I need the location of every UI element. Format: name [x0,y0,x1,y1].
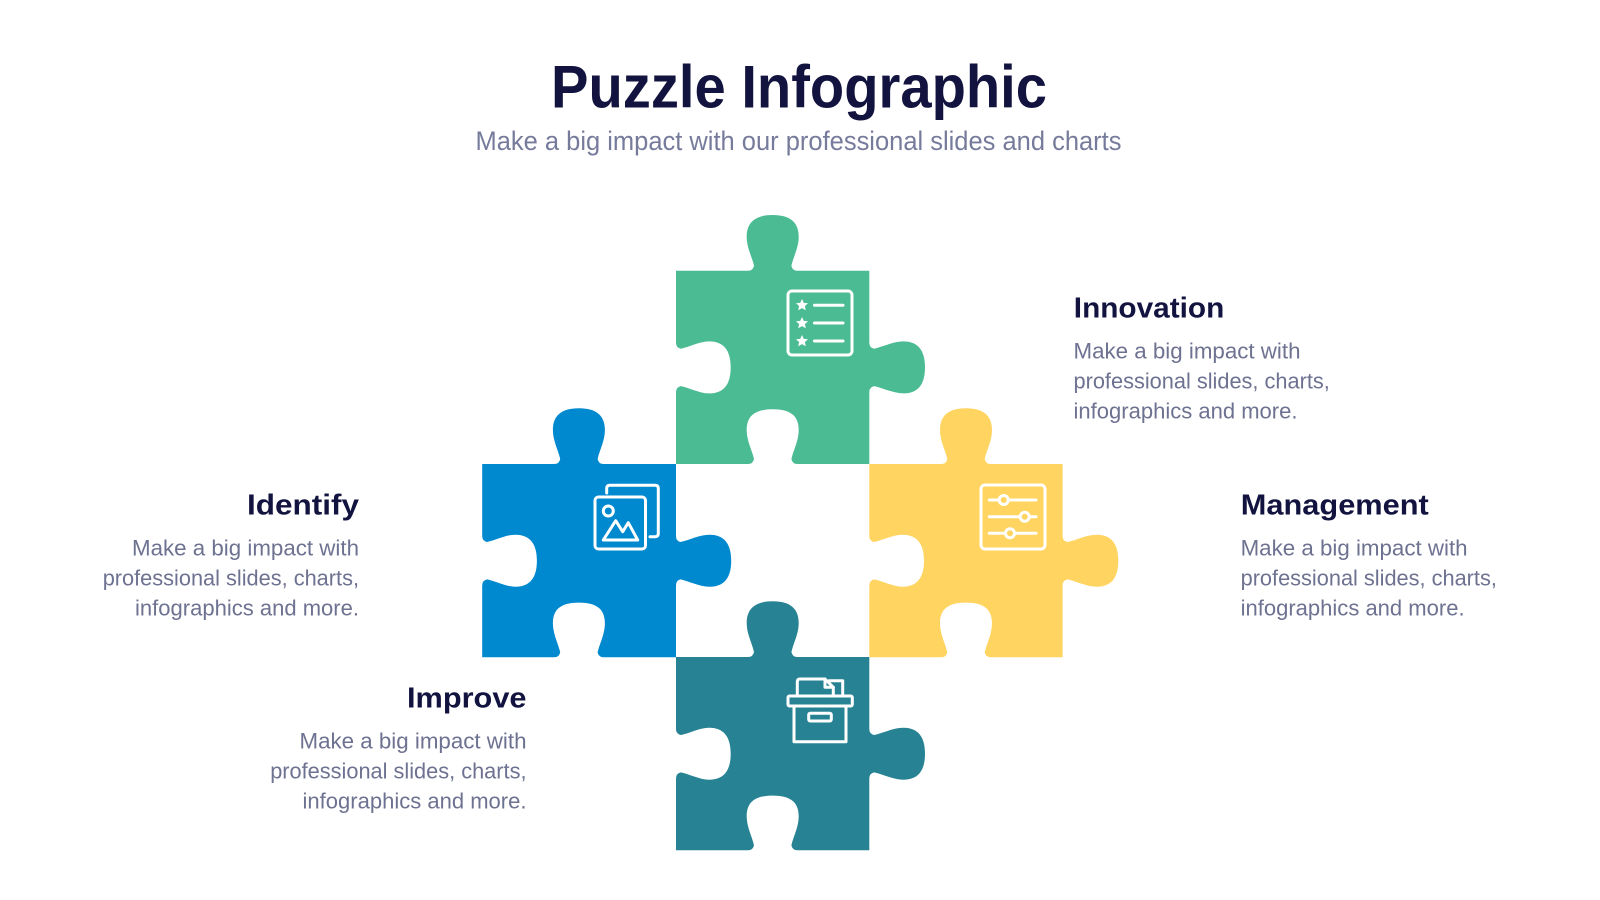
text block: Management [1241,490,1497,620]
heading: Innovation: Innovation [1074,293,1224,325]
body: Improve: infographics and more. [302,788,526,813]
text block: Improve [270,683,526,813]
puzzle piece: yellow [869,408,1118,657]
heading: Identify: Identify [247,490,359,522]
body: Improve [270,728,526,813]
subtitle: Make a big impact with our professional slides and charts [476,126,1122,156]
body: Innovation: professional slides, charts, [1074,368,1330,393]
icon: star checklist [788,291,852,355]
icon: archive box [788,679,852,742]
body: Management [1241,535,1497,620]
body: Management: professional slides, charts, [1241,565,1497,590]
body: Identify: infographics and more. [135,595,359,620]
body: Innovation [1074,338,1330,423]
heading: Management: Management [1241,490,1429,522]
heading: Improve: Improve [407,683,526,715]
icon: sliders [981,485,1045,549]
puzzle piece: teal [676,601,925,850]
body: Improve: professional slides, charts, [270,758,526,783]
title: Puzzle Infographic [551,54,1047,120]
puzzle piece: blue [482,408,731,657]
body: Identify: professional slides, charts, [103,565,359,590]
body: Innovation: Make a big impact with [1074,338,1300,363]
text block: Innovation [1074,293,1330,423]
icon: image gallery [595,485,658,549]
puzzle piece: green [676,215,925,464]
body: Identify: Make a big impact with [132,535,359,560]
text block: Identify [103,490,359,620]
body: Innovation: infographics and more. [1074,398,1298,423]
body: Management: Make a big impact with [1241,535,1468,560]
body: Identify [103,535,359,620]
body: Improve: Make a big impact with [300,728,526,753]
body: Management: infographics and more. [1241,595,1465,620]
